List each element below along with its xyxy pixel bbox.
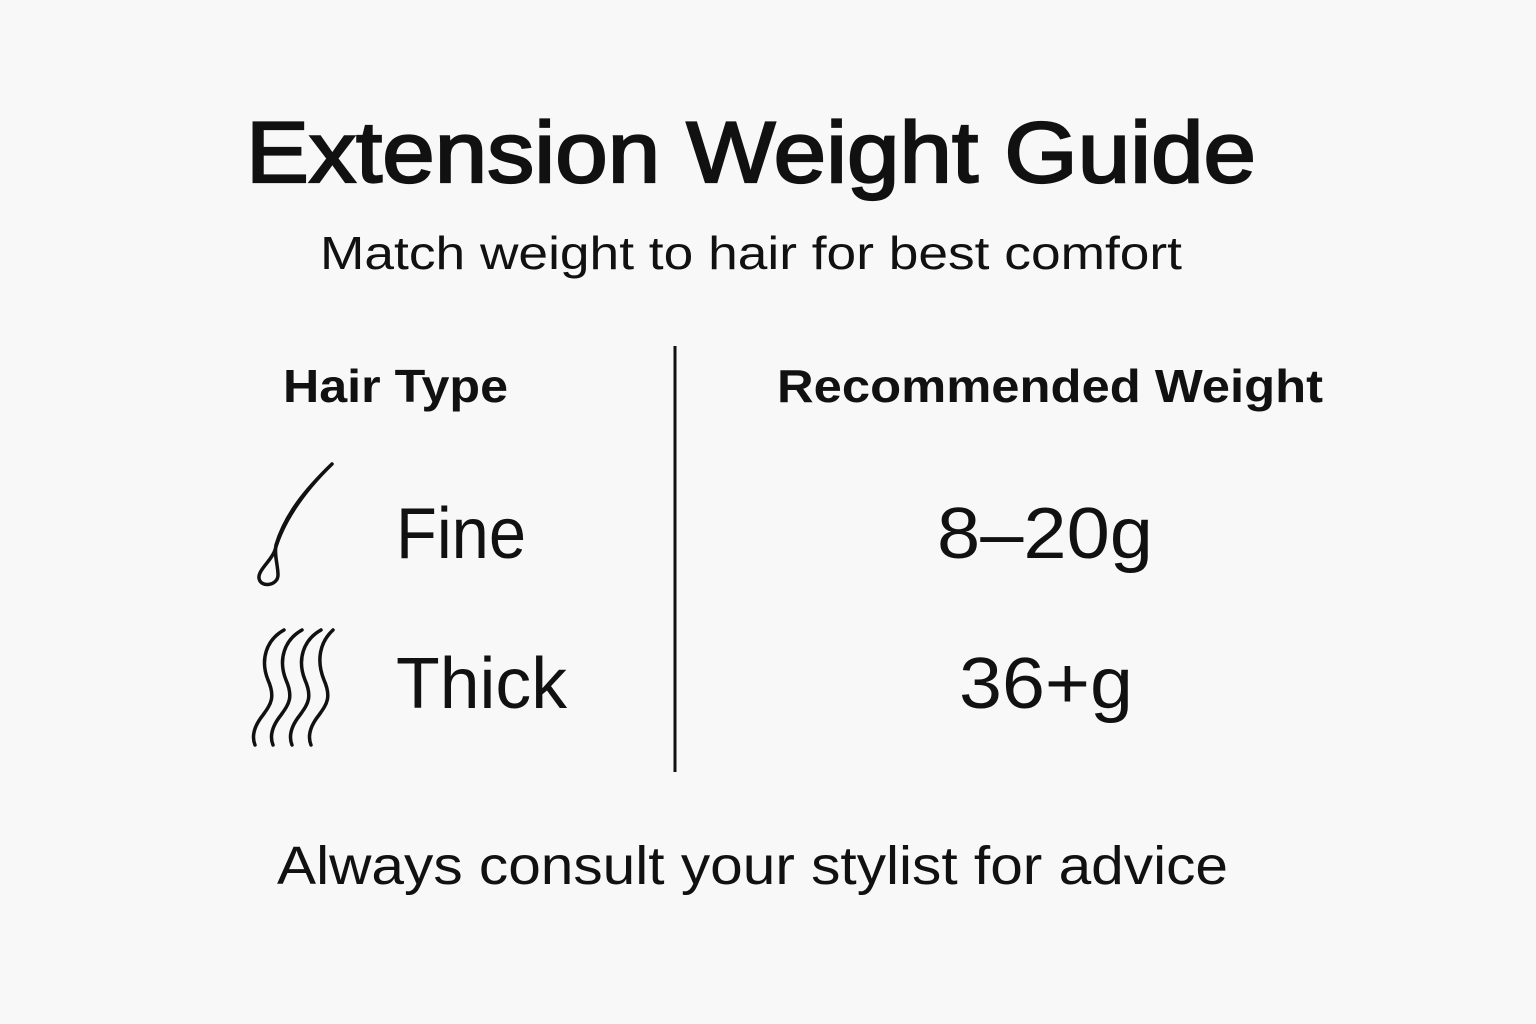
icon: fine hair [259,464,332,584]
value: fine weight: 8–20g [937,494,1153,574]
header: recommended weight: Recommended Weight [777,360,1323,412]
value: thick weight: 36+g [959,644,1133,724]
title: Extension Weight Guide [246,105,1256,201]
footer note: Always consult your stylist for advice [277,836,1228,896]
header: hair type: Hair Type [283,360,508,412]
subtitle: Match weight to hair for best comfort [320,227,1182,279]
label: thick: Thick [396,644,568,724]
label: fine: Fine [396,494,526,574]
divider [674,346,676,772]
icon: thick hair [253,630,333,745]
